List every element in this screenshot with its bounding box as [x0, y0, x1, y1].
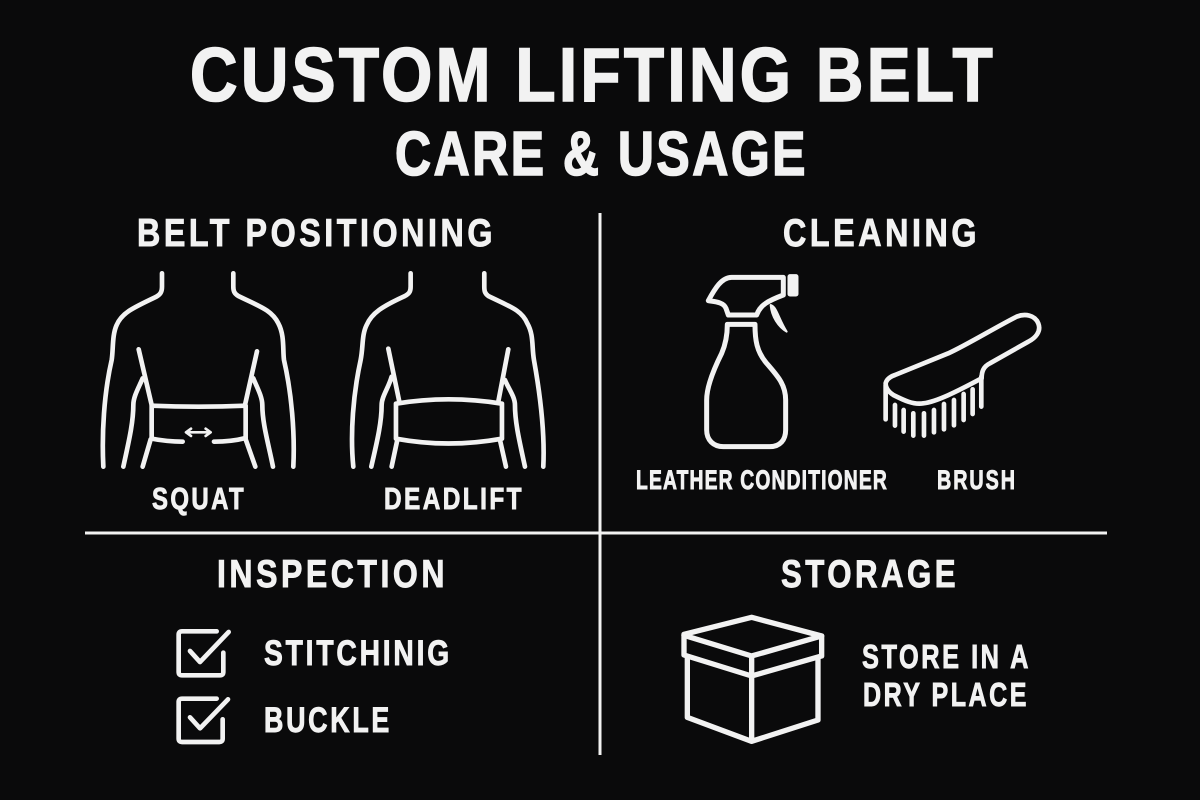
label: squat: SQUAT	[152, 481, 246, 516]
label: brush: BRUSH	[937, 465, 1017, 495]
text: store in a dry place: DRY PLACE	[863, 676, 1029, 713]
label: leather conditioner: LEATHER CONDITIONER	[636, 465, 888, 495]
icon: checkbox 2	[179, 699, 228, 742]
heading: storage: STORAGE	[781, 553, 959, 596]
heading: inspection: INSPECTION	[217, 553, 448, 596]
subtitle: CARE & USAGE	[395, 120, 808, 189]
checklist item: stitching	[179, 631, 452, 675]
heading: cleaning: CLEANING	[783, 212, 980, 255]
heading: belt positioning: BELT POSITIONING	[137, 212, 496, 255]
panel: cleaning	[636, 212, 1039, 495]
icon: brush	[886, 315, 1039, 436]
label: buckle: BUCKLE	[264, 701, 392, 740]
icon: checkbox 1	[179, 631, 229, 675]
icon: spray bottle	[707, 277, 796, 447]
title: CUSTOM LIFTING BELT	[190, 33, 996, 118]
checklist item: buckle	[179, 699, 392, 742]
label: stitching: STITCHINIG	[264, 634, 452, 673]
icon: squat torso with belt	[103, 273, 294, 467]
label: deadlift: DEADLIFT	[384, 481, 524, 516]
text: store in a dry place: STORE IN A	[862, 638, 1031, 675]
icon: box	[684, 617, 822, 741]
panel: inspection	[179, 553, 452, 742]
panel: storage	[684, 553, 1035, 741]
panel: belt positioning	[103, 212, 544, 516]
icon: deadlift torso with belt	[352, 273, 544, 467]
